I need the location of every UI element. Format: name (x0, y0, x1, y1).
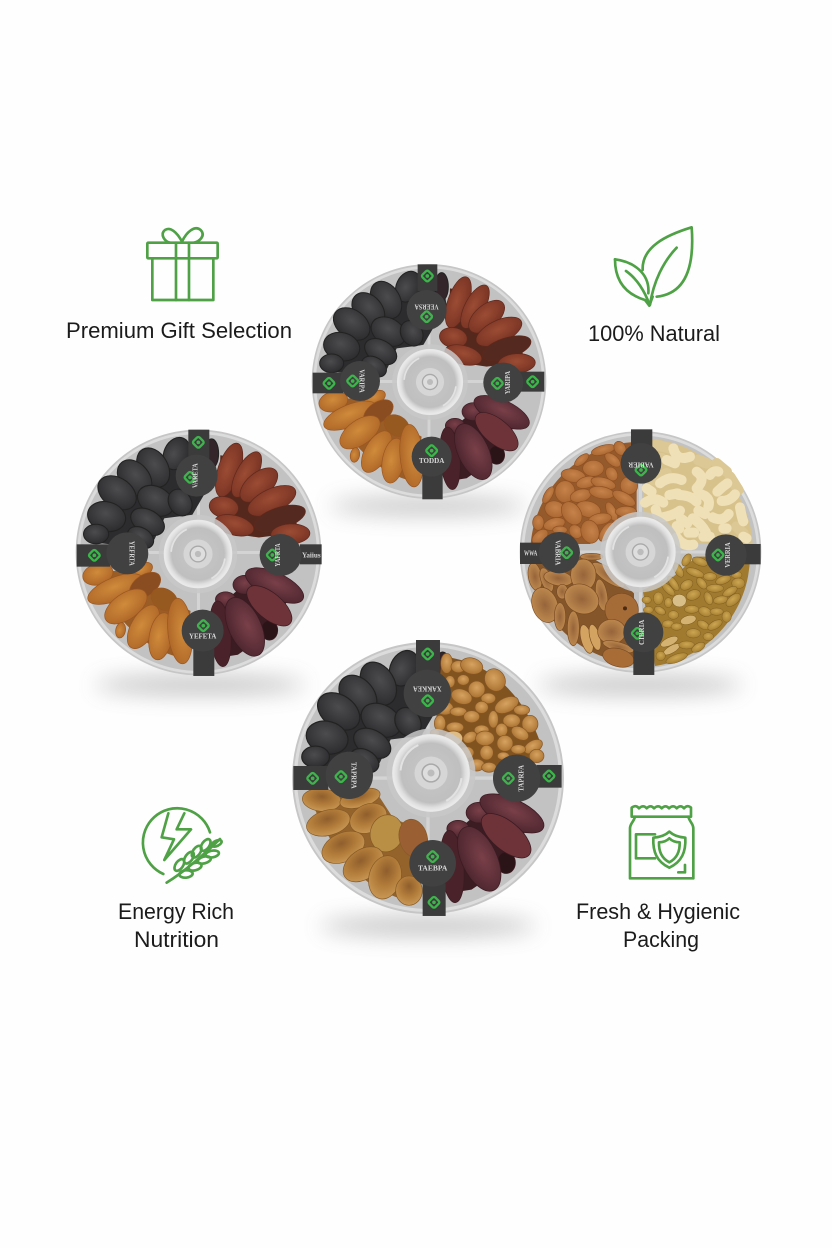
sticker seals: VERRIA (723, 542, 732, 568)
cashew section (643, 438, 753, 545)
sticker seals: TAPRPA (350, 762, 359, 789)
nuts and dried fruit (526, 438, 753, 670)
tray: nuts and figs assortment, right (520, 429, 761, 675)
label: 100% Natural: 100% Natural (588, 321, 720, 346)
pale date section (301, 784, 432, 905)
raisin section (642, 552, 750, 666)
label: Energy Rich Nutrition: Energy Rich (118, 899, 234, 924)
sticker seals: VARETA (191, 463, 200, 488)
tray: dates assortment, top (312, 264, 546, 499)
dried fig section (526, 553, 638, 670)
sticker seals: XAKKEA (413, 685, 442, 694)
label: Fresh & Hygienic Packing: Packing (623, 927, 699, 952)
label: Fresh & Hygienic Packing (576, 899, 740, 952)
icon: leaves (615, 227, 692, 306)
sticker seals: VABIER (628, 461, 654, 470)
walnut section (430, 653, 545, 772)
sticker seals: VEERSA (414, 302, 439, 311)
sticker seals: VARIPA (357, 369, 366, 393)
sticker seals (520, 429, 761, 675)
icon: sealed pack with shield (630, 806, 693, 878)
sticker seals: TAEBPA (418, 864, 448, 873)
sticker seals: VABRIA (553, 540, 562, 566)
tray: dates and walnuts assortment, bottom (293, 640, 563, 916)
sticker seals: YAFRTA (273, 543, 282, 567)
label: Energy Rich Nutrition (118, 899, 234, 952)
almond section (529, 439, 638, 547)
dates assortment (317, 267, 536, 490)
sticker seals: YEFETA (189, 632, 217, 641)
sticker seals: TAPRFA (516, 765, 525, 792)
black and maroon dates (302, 646, 549, 904)
sticker seals (77, 430, 322, 676)
sticker seals (293, 640, 562, 916)
sticker seals: WWA (524, 549, 538, 558)
dates assortment (80, 433, 310, 667)
label: Fresh & Hygienic Packing: Fresh & Hygienic (576, 899, 740, 924)
icon: energy bolt and wheat (143, 808, 223, 883)
tray: dates assortment, left (76, 430, 322, 676)
sticker seals: Yaiius (302, 550, 321, 559)
tray shadows (95, 497, 742, 936)
sticker seals (313, 264, 544, 499)
icon: gift box (147, 228, 218, 300)
sticker seals: TODDA (419, 456, 445, 465)
sticker seals: CIBRIA (637, 619, 646, 645)
sticker seals: YARIPA (503, 371, 512, 394)
label: Energy Rich Nutrition: Nutrition (134, 927, 219, 952)
sticker seals: YEFRTA (127, 541, 136, 566)
walnuts and pale dates (301, 653, 545, 905)
label: Premium Gift Selection: Premium Gift Selection (66, 318, 292, 343)
